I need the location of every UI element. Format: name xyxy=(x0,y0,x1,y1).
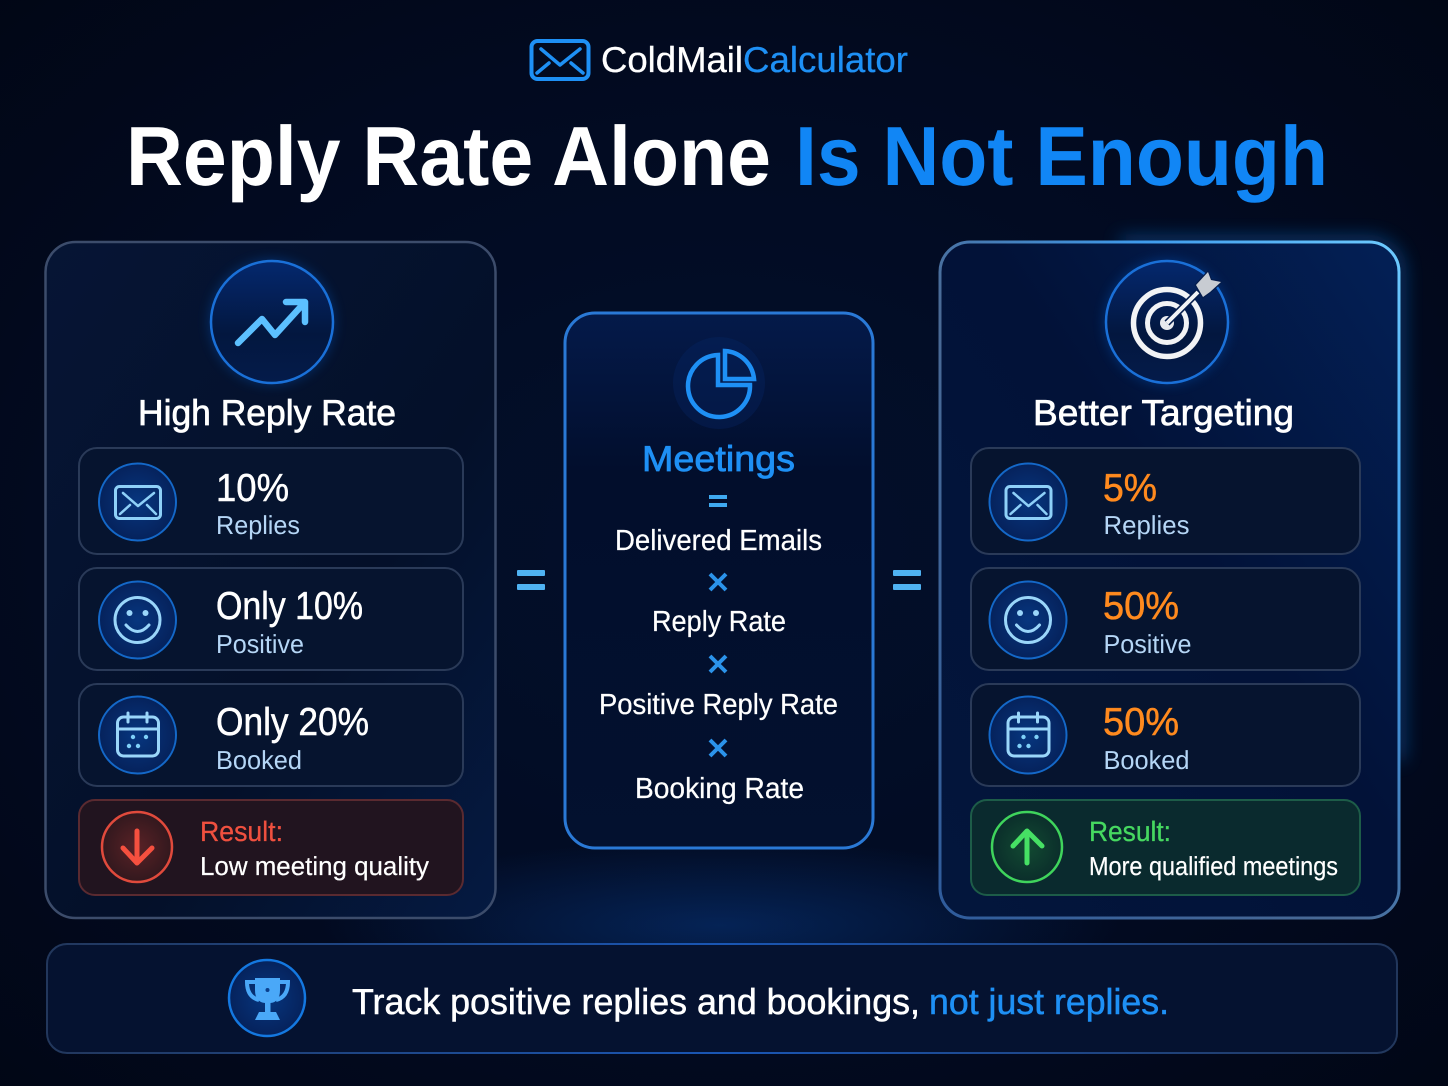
icon: pie chart xyxy=(673,337,765,429)
row: 50% booked xyxy=(971,684,1360,786)
callout text: not just replies. xyxy=(929,981,1169,1022)
logo: ColdMailCalculator xyxy=(532,39,908,80)
label: Booked: Booked xyxy=(1104,745,1190,775)
result text: More qualified meetings xyxy=(1089,851,1338,881)
result label: Result: xyxy=(1089,816,1171,847)
stat: 5%: 5% xyxy=(1103,467,1157,510)
label: Positive: Positive xyxy=(1104,629,1192,659)
callout: bottom takeaway bar xyxy=(47,944,1397,1053)
stat: Only 20%: Only 20% xyxy=(216,701,369,744)
heading: High Reply Rate: High Reply Rate xyxy=(138,392,396,433)
result label: Result: xyxy=(200,816,283,847)
result: low meeting quality xyxy=(79,800,463,895)
heading: Meetings: Meetings xyxy=(642,438,795,479)
stat: Only 10%: Only 10% xyxy=(216,585,363,628)
term: Delivered Emails: Delivered Emails xyxy=(615,525,822,557)
panel glow xyxy=(1120,242,1399,760)
icon: logo envelope xyxy=(532,41,588,79)
panel: Better Targeting xyxy=(940,242,1399,918)
icon: calendar xyxy=(990,696,1066,774)
icon: smiley xyxy=(990,582,1066,658)
panel frame xyxy=(565,313,873,848)
icon: up arrow xyxy=(992,812,1062,882)
icon: calendar xyxy=(99,696,176,774)
term: Booking Rate: Booking Rate xyxy=(635,773,804,805)
result: more qualified meetings xyxy=(971,800,1360,895)
heading: Better Targeting: Better Targeting xyxy=(1033,392,1294,433)
icon: envelope xyxy=(990,464,1066,540)
label: Replies: Replies xyxy=(1104,510,1190,540)
operator: times xyxy=(710,656,726,672)
operator: equals xyxy=(709,495,727,507)
icon: trending up arrow xyxy=(210,260,334,384)
icon: smiley xyxy=(99,582,176,658)
stat: 50%: 50% xyxy=(1103,701,1179,744)
stat: 50%: 50% xyxy=(1103,585,1179,628)
icon: down arrow xyxy=(102,812,172,882)
stat: 10%: 10% xyxy=(216,467,289,510)
logo wordmark xyxy=(601,39,908,80)
operator: times xyxy=(710,574,726,590)
result text: Low meeting quality xyxy=(200,851,429,881)
icon: trophy xyxy=(229,960,305,1036)
title: Is Not Enough xyxy=(795,109,1328,203)
icon: envelope xyxy=(99,464,176,540)
label: Replies: Replies xyxy=(216,510,300,540)
term: Reply Rate: Reply Rate xyxy=(652,606,786,638)
title: Reply Rate Alone xyxy=(126,109,771,203)
title xyxy=(126,109,1328,203)
equals sign: right xyxy=(893,570,921,590)
row: 5% replies xyxy=(971,448,1360,554)
equals sign: left xyxy=(517,570,545,590)
icon: target with arrow xyxy=(1105,260,1229,384)
logo wordmark: Calculator xyxy=(743,39,908,80)
operator: times xyxy=(710,740,726,756)
label: Positive: Positive xyxy=(216,629,304,659)
panel: High Reply Rate xyxy=(46,242,496,918)
term: Positive Reply Rate: Positive Reply Rate xyxy=(599,689,838,721)
panel frame xyxy=(940,242,1399,918)
logo wordmark: ColdMail xyxy=(601,39,743,80)
callout text xyxy=(352,981,1169,1022)
row: 10% replies xyxy=(79,448,463,554)
label: Booked: Booked xyxy=(216,745,302,775)
row: only 20% booked xyxy=(79,684,463,786)
callout text: Track positive replies and bookings, xyxy=(352,981,920,1022)
row: 50% positive xyxy=(971,568,1360,670)
panel frame xyxy=(46,242,496,918)
row: only 10% positive xyxy=(79,568,463,670)
panel: Meetings formula xyxy=(565,313,873,848)
bar frame xyxy=(47,944,1397,1053)
